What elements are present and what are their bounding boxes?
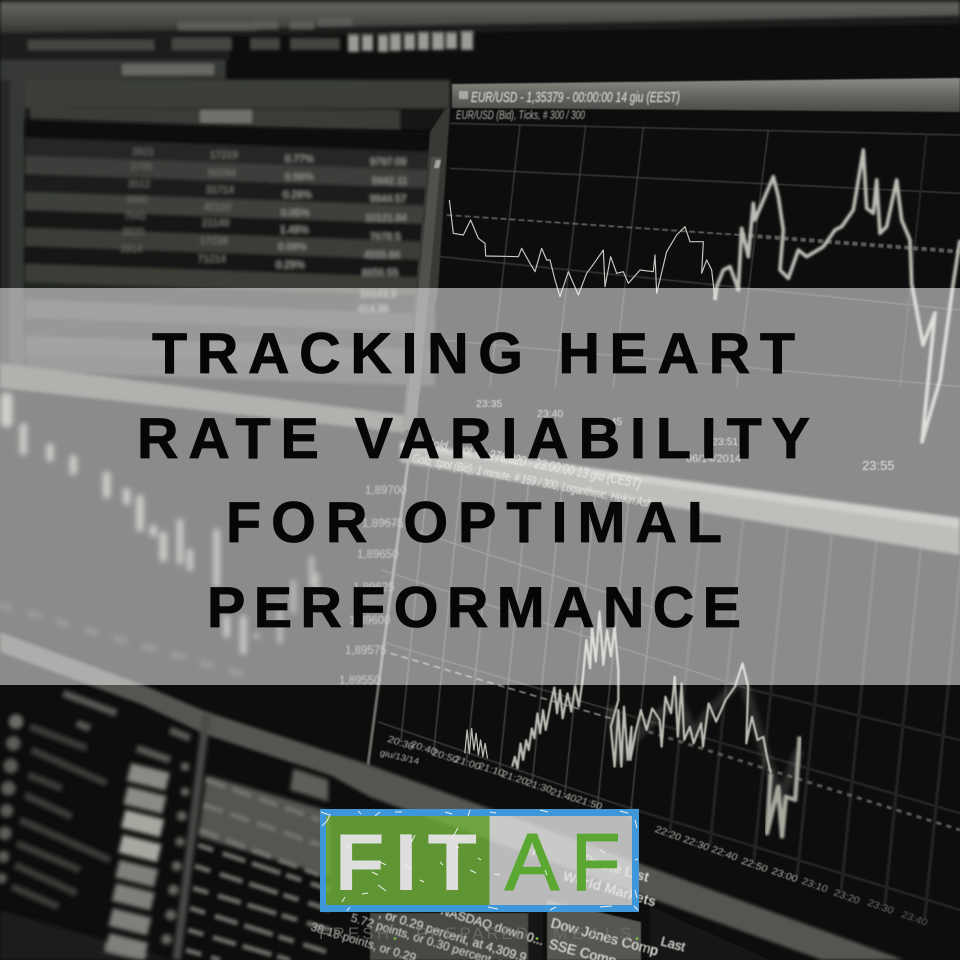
- left quote table: 1.48%: [280, 225, 308, 236]
- lower chart time labels: 22:20: [653, 825, 683, 843]
- left quote table: 4555.86: [364, 250, 401, 261]
- lower chart time labels: 21:20: [499, 770, 529, 788]
- left chart price axis: 1,89700: [365, 485, 407, 497]
- left quote table: [25, 119, 435, 386]
- left chart price axis: 1,89650: [357, 549, 399, 561]
- lower chart grid: [378, 464, 960, 919]
- lower chart time labels: 21:30: [524, 778, 554, 796]
- title: FOR OPTIMAL: [226, 491, 722, 555]
- top chart time labels: 06/14/2014: [686, 453, 741, 465]
- left quote table: 50294: [208, 168, 236, 179]
- left quote table: 31714: [206, 185, 234, 196]
- logo distress marks: [321, 810, 638, 911]
- title: RATE VARIABILITY: [137, 407, 810, 471]
- left quote table: 0.05%: [281, 208, 309, 219]
- bottom left list panel: [0, 693, 330, 960]
- lower chart time labels: 20:40: [408, 740, 438, 758]
- top right chart title bar: EUR/USD (Bid), Ticks, # 300 / 300: [456, 108, 585, 122]
- bottom centre news table: World Markets: [561, 868, 658, 909]
- left quote table: 71214: [198, 254, 226, 265]
- bottom centre news table: NASDAQ down 0...: [439, 903, 546, 948]
- lower chart time labels: giu/13/14: [379, 748, 420, 766]
- top chart time labels: 23:40: [537, 408, 563, 420]
- lower chart time labels: 23:40: [899, 910, 929, 928]
- lower chart time labels: 21:40: [548, 787, 578, 805]
- logo word AF: A: [505, 818, 559, 908]
- bottom centre news table: Dow Jones Comp: [549, 914, 660, 959]
- lower chart time labels: 21:00: [452, 755, 482, 773]
- left quote table: 42110: [204, 202, 232, 213]
- top right chart grid: [440, 123, 960, 387]
- monitor top bars and toolbar: [0, 0, 960, 380]
- left chart price axis: 1,89550: [339, 675, 381, 687]
- left chart price axis: [339, 485, 407, 687]
- left quote table: 0.77%: [285, 154, 313, 165]
- left quote table: 7041: [124, 211, 147, 222]
- left quote table: 17238: [200, 236, 228, 247]
- lower chart time labels: [379, 735, 929, 928]
- tagline under logo: [319, 924, 638, 943]
- left chart price axis: 1,89575: [345, 645, 387, 657]
- top right price line: [449, 150, 960, 442]
- lower chart time labels: 23:00: [770, 866, 799, 885]
- left blurred candle chart: [0, 398, 317, 678]
- left quote table: 3795: [130, 162, 153, 173]
- translucent title band: [0, 288, 960, 685]
- left quote table: 0.29%: [276, 260, 304, 271]
- top right chart title bar: [452, 78, 960, 122]
- lower chart time labels: 21:10: [476, 761, 506, 779]
- top chart time labels: [476, 398, 895, 473]
- left quote table: 0.09%: [278, 242, 306, 253]
- left quote table: 3921: [132, 147, 155, 158]
- tagline under logo: PREPARED: [416, 924, 528, 943]
- title: TRACKING HEART: [152, 322, 795, 386]
- top chart time labels: 23:55: [862, 458, 895, 473]
- lower chart time labels: 21:50: [574, 795, 604, 813]
- left quote table: 9990: [126, 195, 149, 206]
- lower chart time labels: 20:50: [430, 748, 460, 766]
- left chart price axis: 1,89600: [349, 615, 391, 627]
- left panel divider strip: [0, 363, 904, 960]
- left quote table: 9797.09: [370, 157, 407, 168]
- lower chart time labels: 20:30: [386, 735, 416, 753]
- top chart time labels: 23:45: [596, 416, 622, 428]
- left quote table: 3914: [120, 244, 143, 255]
- left quote table: 8656.55: [362, 268, 399, 279]
- title: [137, 322, 810, 640]
- lower chart time labels: 22:40: [709, 845, 739, 863]
- left quote table: 21149: [202, 218, 230, 229]
- logo green panel: [326, 816, 490, 905]
- lower chart time labels: 23:30: [866, 898, 895, 917]
- top chart time labels: 23:51: [712, 436, 738, 448]
- lower chart header text: Gold, spot - 1,276,820 - 23:00:00 13 giu (CEST): [424, 434, 643, 491]
- title: PERFORMANCE: [207, 576, 741, 640]
- lower chart time labels: 23:10: [800, 876, 830, 895]
- left quote table: 3512: [128, 179, 151, 190]
- left quote table: 9944.57: [370, 194, 407, 205]
- left quote table: 414.36: [358, 304, 389, 315]
- tagline under logo: FRESH: [319, 924, 389, 943]
- lower chart candles: [465, 612, 800, 837]
- left quote table: 7678.5: [370, 232, 401, 243]
- top chart time labels: 23:35: [476, 398, 502, 410]
- left quote table: 17219: [210, 150, 238, 161]
- tagline under logo: MEALS: [553, 924, 631, 943]
- left quote table: 10121.84: [365, 213, 407, 224]
- left quote table: 3820: [122, 227, 145, 238]
- logo word AF: F: [571, 818, 620, 908]
- logo: FIT AF: [320, 809, 639, 912]
- left quote table: 5942.11: [372, 176, 408, 187]
- lower chart left frame: [368, 462, 408, 765]
- logo word FIT: FIT: [335, 818, 477, 908]
- top right chart title bar: EUR/USD - 1,35379 - 00:00:00 14 giu (EEST): [471, 89, 680, 106]
- lower chart header text: Gold, spot (Bid), 1 minute, # 159 / 300, Logarithmic, Heikin Ashi: [411, 451, 656, 511]
- lower chart time labels: 22:50: [739, 856, 769, 875]
- lower chart time labels: 23:20: [832, 888, 862, 907]
- logo blue frame: [320, 809, 639, 912]
- left quote table: 0.56%: [285, 172, 313, 183]
- lower chart title bar: [400, 442, 960, 555]
- bottom centre news table: Quote List: [580, 851, 651, 885]
- left chart price axis: 1,89625: [353, 582, 395, 594]
- logo word AF: [505, 818, 620, 908]
- lower chart time labels: 22:30: [681, 835, 711, 853]
- left quote table: 10143.3: [360, 289, 397, 300]
- left chart price axis: 1,89675: [362, 518, 404, 530]
- scrollbar and panel frame: [402, 108, 450, 430]
- bottom centre news table: Last: [659, 933, 687, 954]
- left quote table: 0.29%: [283, 190, 311, 201]
- logo light panel: [490, 816, 632, 905]
- bottom centre news table: [186, 780, 770, 960]
